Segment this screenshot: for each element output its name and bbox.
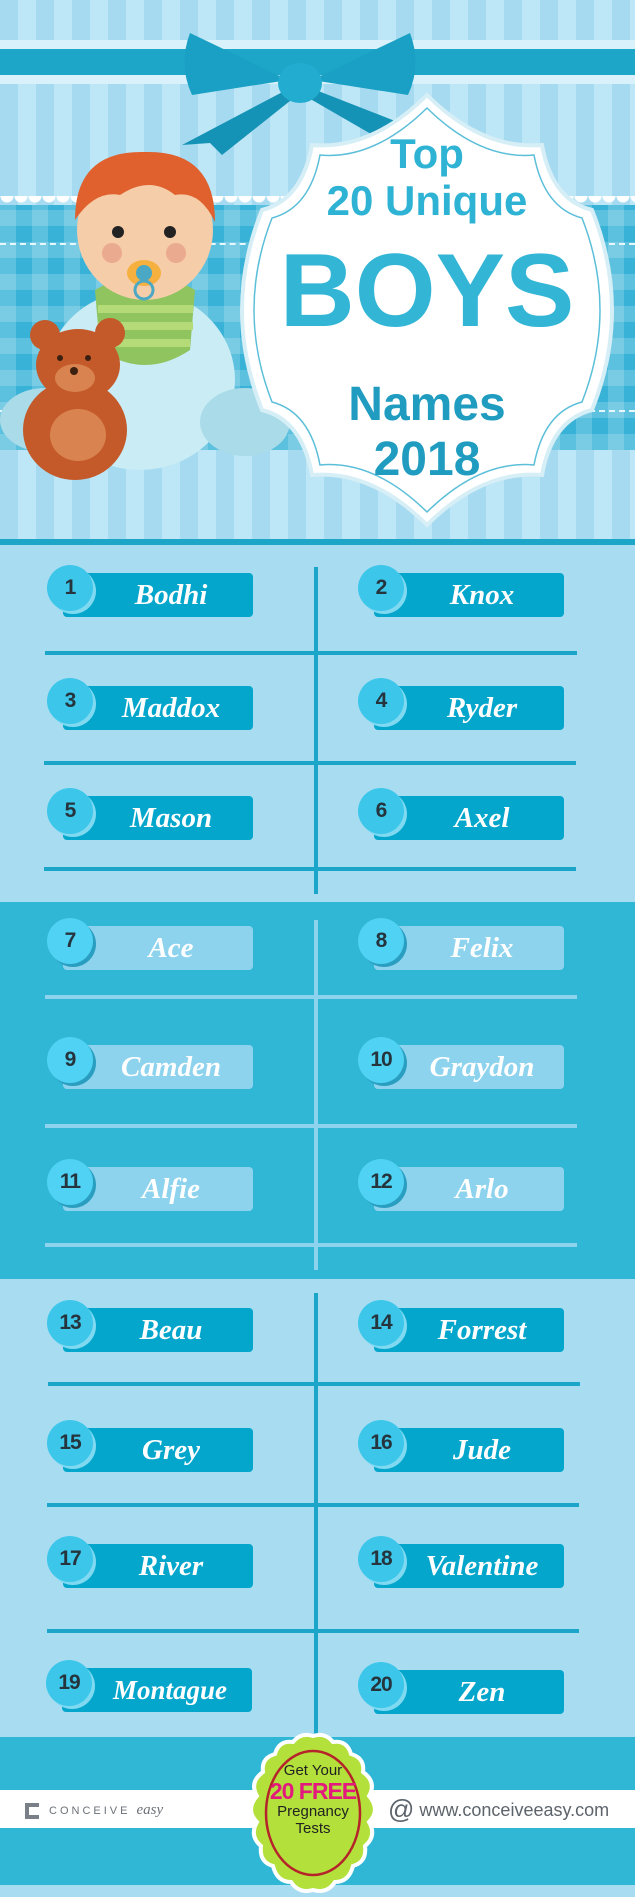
item 6: Axel (455, 802, 509, 834)
item 1: Bodhi (135, 579, 207, 611)
item 4: Ryder (447, 692, 517, 724)
item 9: Camden (121, 1051, 221, 1083)
item 8 (358, 918, 564, 970)
plaque (240, 92, 614, 528)
item 6 (358, 788, 564, 840)
item 15 (47, 1420, 253, 1472)
item 19 (46, 1660, 252, 1712)
item 16 (358, 1420, 564, 1472)
item 9 (47, 1037, 253, 1089)
item 13 (47, 1300, 253, 1352)
icon: bow (182, 33, 414, 155)
item 2: 2 (376, 576, 386, 599)
item 5: 5 (65, 799, 75, 822)
header (0, 0, 635, 543)
badge: Tests (295, 1820, 330, 1837)
item 7: Ace (148, 932, 194, 964)
url: @ www.conceiveeasy.com (388, 1794, 609, 1824)
item 18: 18 (370, 1547, 392, 1570)
panel: names 7-12 (0, 902, 635, 1279)
badge (252, 1732, 374, 1893)
title: Names (348, 378, 506, 431)
icon: baby with teddy bear (0, 152, 290, 480)
item 16: 16 (370, 1431, 392, 1454)
item 1: 1 (65, 576, 75, 599)
item 16: Jude (453, 1434, 511, 1466)
item 3: Maddox (122, 692, 220, 724)
title (280, 130, 574, 486)
item 17: River (139, 1550, 203, 1582)
item 5 (47, 788, 253, 840)
item 17 (47, 1536, 253, 1588)
item 11: 11 (60, 1170, 80, 1193)
item 8: Felix (451, 932, 513, 964)
title: BOYS (280, 233, 574, 349)
item 13: Beau (140, 1314, 202, 1346)
ribbon band (0, 40, 635, 84)
item 19: Montague (113, 1675, 227, 1705)
item 14 (358, 1300, 564, 1352)
item 11 (47, 1159, 253, 1211)
item 4: 4 (376, 689, 386, 712)
item 1 (47, 565, 253, 617)
gingham band (0, 205, 635, 450)
item 7 (47, 918, 253, 970)
item 19: 19 (58, 1671, 80, 1694)
item 18: Valentine (426, 1550, 538, 1582)
item 15: Grey (142, 1434, 200, 1466)
title: 20 Unique (327, 177, 527, 224)
panel: names 1-6 (0, 545, 635, 902)
item 3 (47, 678, 253, 730)
item 14: 14 (370, 1311, 392, 1334)
badge: Get Your (284, 1762, 342, 1779)
item 7: 7 (65, 929, 75, 952)
item 8: 8 (376, 929, 386, 952)
item 11: Alfie (142, 1173, 200, 1205)
title: Top (390, 130, 464, 177)
item 15: 15 (59, 1431, 81, 1454)
title: 2018 (374, 433, 480, 486)
panel: names 13-20 (0, 1279, 635, 1738)
item 12: 12 (370, 1170, 392, 1193)
item 2: Knox (450, 579, 514, 611)
item 13: 13 (59, 1311, 81, 1334)
item 4 (358, 678, 564, 730)
item 2 (358, 565, 564, 617)
item 20 (358, 1662, 564, 1714)
item 6: 6 (376, 799, 386, 822)
badge: 20 FREE (270, 1778, 356, 1804)
item 5: Mason (130, 802, 212, 834)
item 20: 20 (370, 1673, 392, 1696)
item 17: 17 (59, 1547, 81, 1570)
logo: CONCEIVE easy (49, 1802, 163, 1818)
item 10: 10 (370, 1048, 392, 1071)
item 3: 3 (65, 689, 75, 712)
item 9: 9 (65, 1048, 75, 1071)
item 20: Zen (459, 1676, 505, 1708)
item 12: Arlo (455, 1173, 509, 1205)
item 10 (358, 1037, 564, 1089)
item 10: Graydon (430, 1051, 534, 1083)
badge: Pregnancy (277, 1803, 349, 1820)
item 12 (358, 1159, 564, 1211)
item 14: Forrest (438, 1314, 526, 1346)
footer (0, 1737, 635, 1885)
item 18 (358, 1536, 564, 1588)
